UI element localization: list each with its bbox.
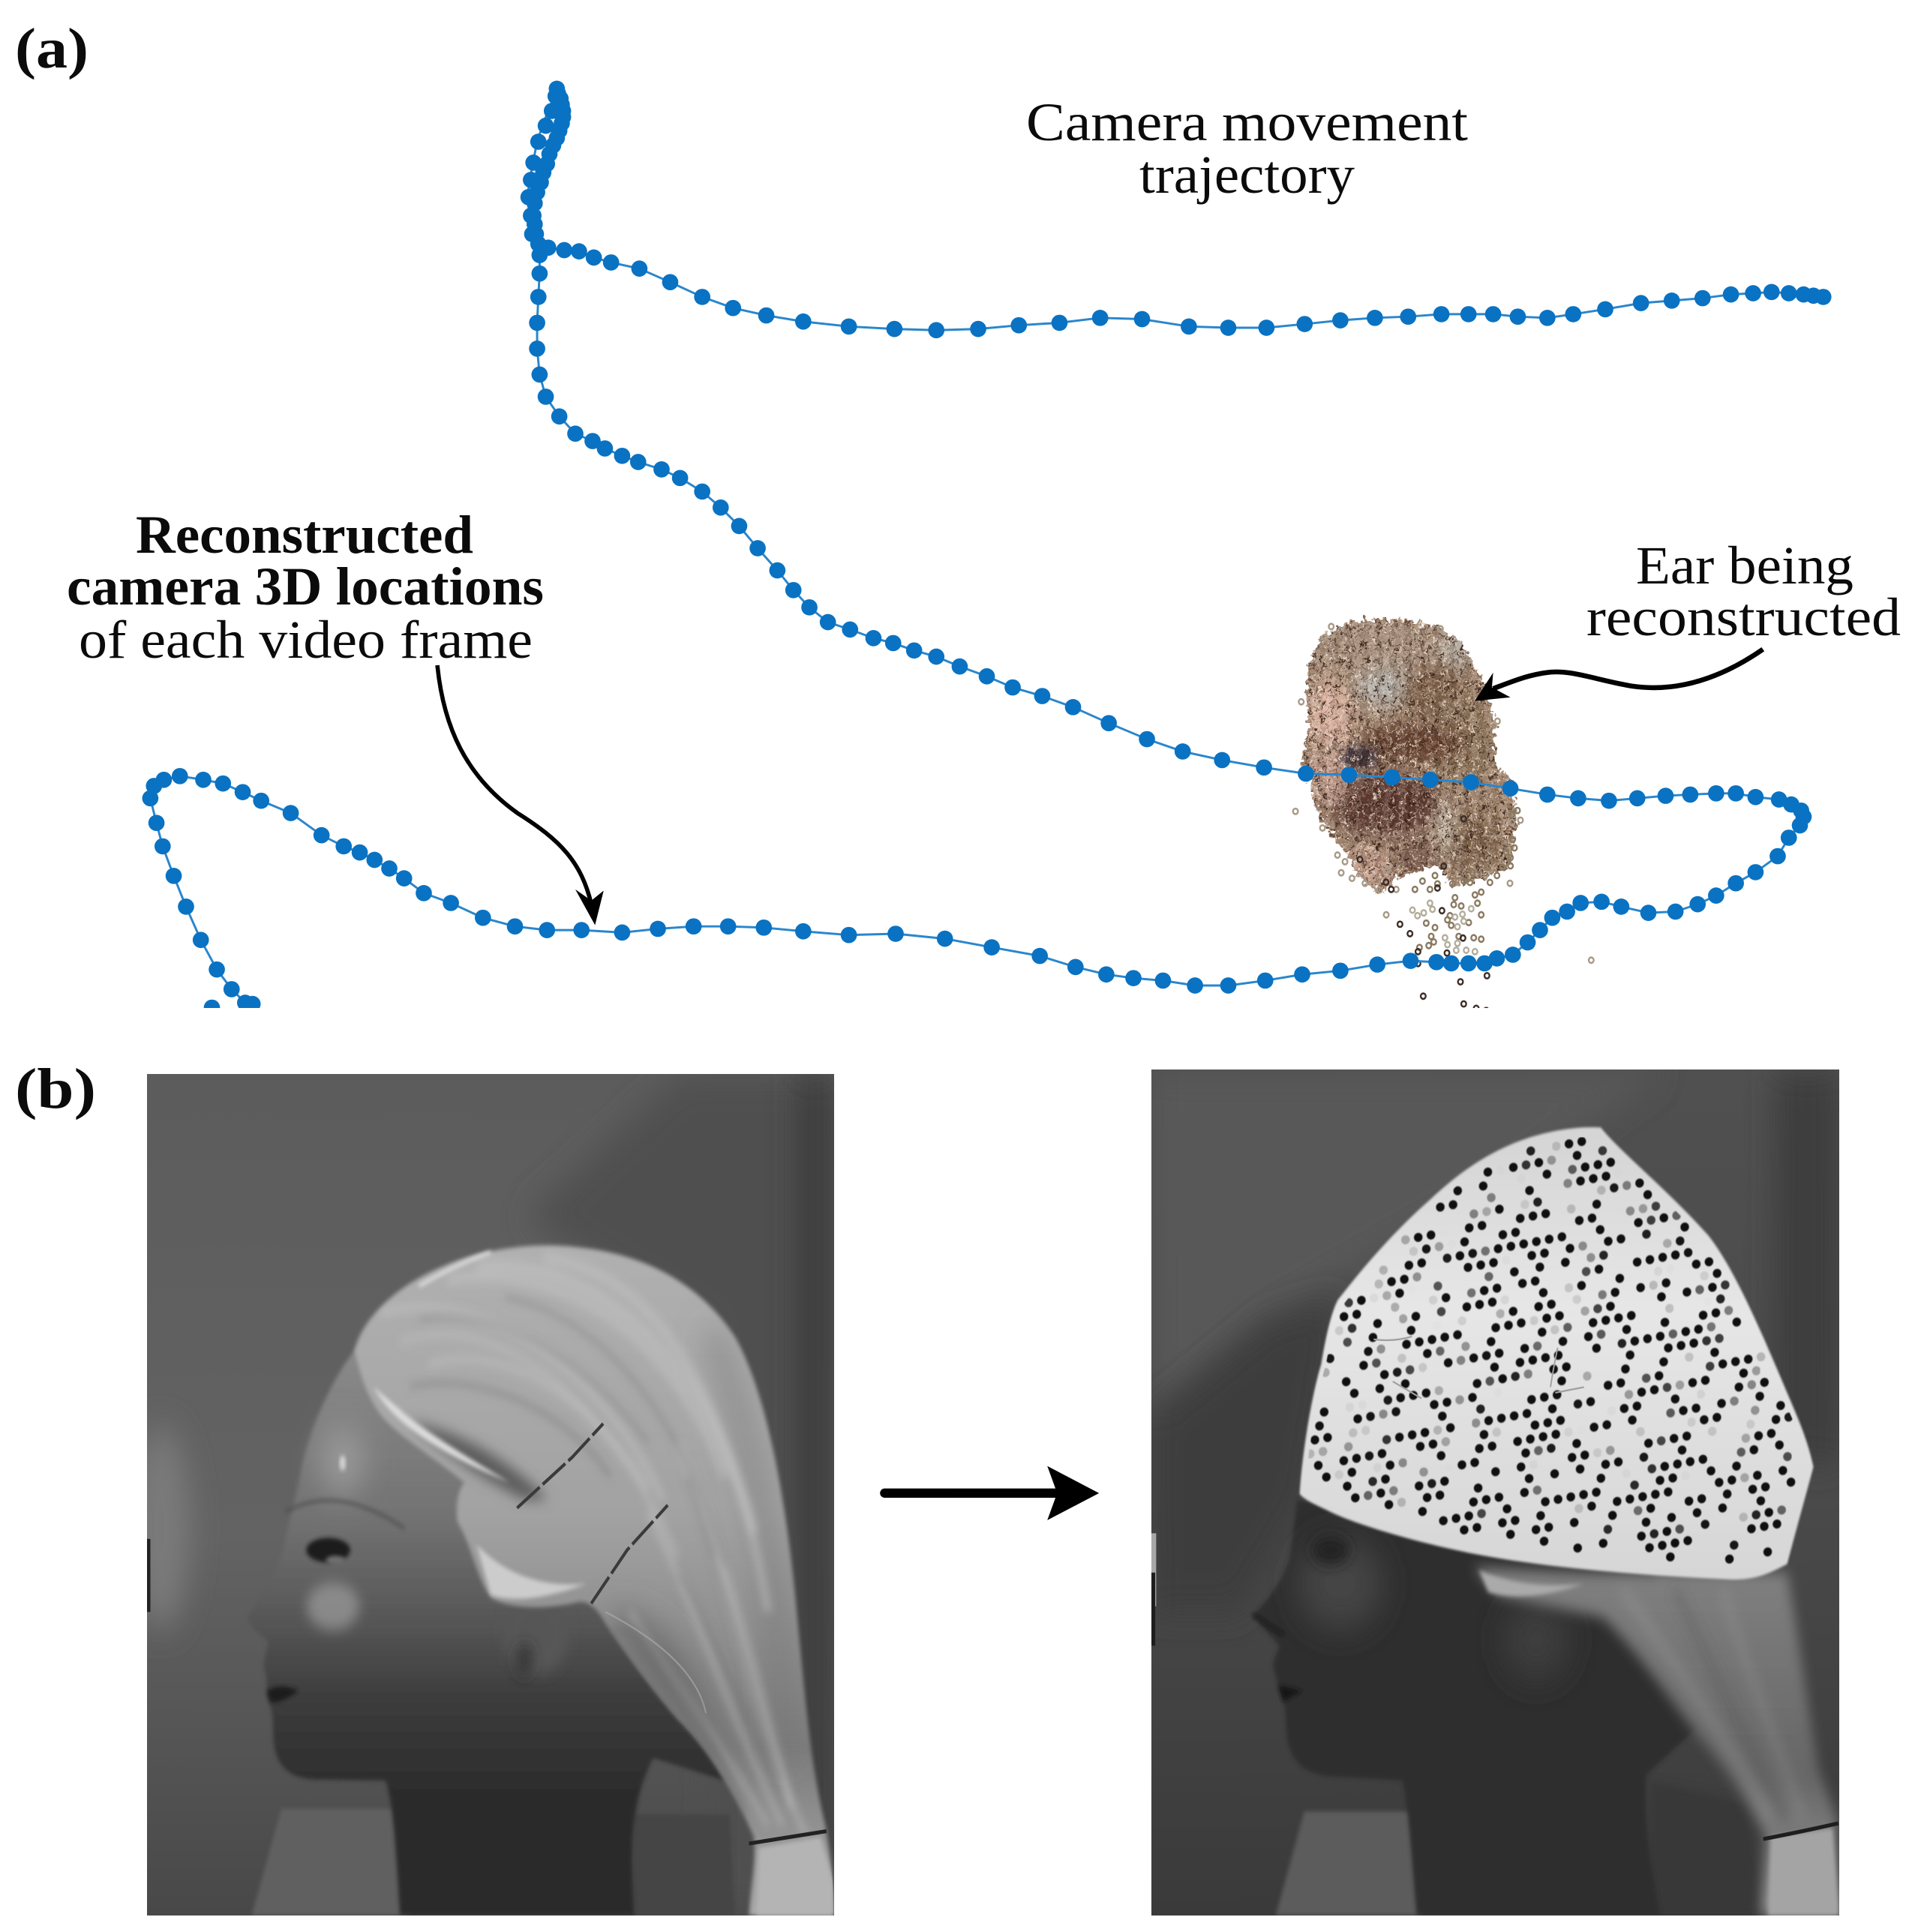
label: camera movement trajectory: trajectory <box>1139 145 1355 205</box>
label: reconstructed camera 3D locations <box>67 505 544 670</box>
mannequin face and neck <box>1253 1499 1713 1916</box>
label: ear being reconstructed <box>1586 536 1901 647</box>
panel label: (b): (b) <box>15 1058 96 1120</box>
label: camera movement trajectory: Camera movement <box>1026 92 1468 152</box>
arrow: to ear <box>1475 650 1763 701</box>
hair band <box>749 1832 827 1844</box>
photo background <box>1151 1070 1839 1916</box>
scattered cloud points <box>1293 624 1594 1013</box>
label: reconstructed camera 3D locations: Reconstructed <box>136 505 473 565</box>
label: reconstructed camera 3D locations: camera 3D locations <box>67 556 544 616</box>
ear point cloud <box>1287 613 1594 1013</box>
panel label: (a): (a) <box>15 17 89 80</box>
blonde hair below cap <box>1474 1567 1839 1916</box>
photo: mannequin head with pinned hair <box>147 1074 834 1916</box>
photo: mannequin head with dotted cap <box>1151 1070 1839 1916</box>
label: camera movement trajectory <box>1026 92 1468 205</box>
label: ear being reconstructed: reconstructed <box>1586 587 1901 647</box>
blonde hair <box>355 1245 833 1916</box>
dotted cap <box>1300 1127 1814 1580</box>
arrow: to camera location <box>437 665 604 926</box>
panel a: camera trajectory scene <box>143 81 1832 1008</box>
photo background <box>132 1074 834 1916</box>
camera locations: one dot per video frame <box>150 88 1823 1008</box>
label: ear being reconstructed: Ear being <box>1636 536 1853 596</box>
arrow: before to after <box>884 1466 1099 1520</box>
camera trajectory line <box>150 88 1823 1004</box>
mannequin face and neck <box>247 1348 725 1916</box>
label: reconstructed camera 3D locations: of each video frame <box>79 610 533 670</box>
ear cloud body <box>1296 615 1520 894</box>
bobby pins <box>517 1424 668 1604</box>
